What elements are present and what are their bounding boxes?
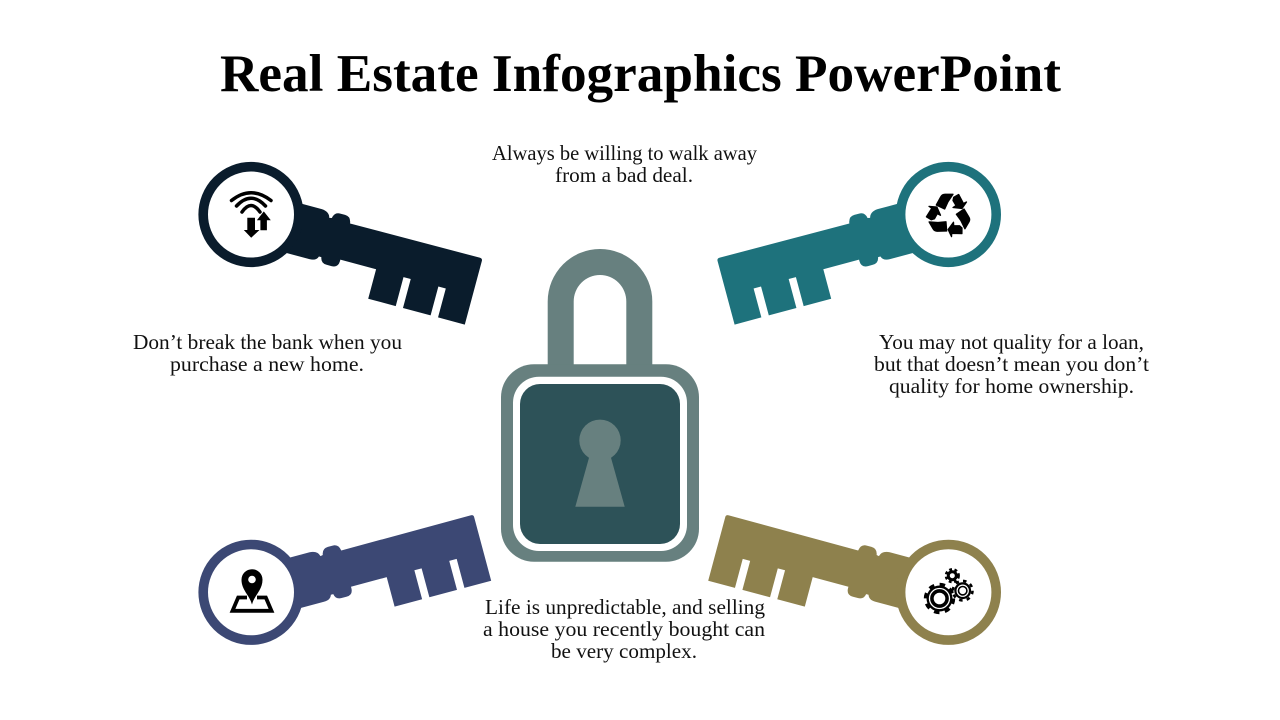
text block: walk away advice: Always be willing to walk away (492, 141, 757, 165)
text block: loan advice: quality for home ownership. (889, 374, 1134, 398)
icon: recycle arrows (922, 194, 973, 241)
text block: loan advice (874, 330, 1149, 398)
padlock (501, 249, 699, 562)
icon: three gears (926, 569, 972, 612)
key: top left navy (203, 167, 484, 325)
icon: wifi with up and down arrows (232, 193, 272, 238)
key: bottom left blue (203, 508, 491, 640)
icon: map pin on map (232, 569, 272, 611)
text block: loan advice: You may not quality for a loan, (879, 330, 1144, 354)
text block: selling advice (483, 595, 765, 663)
key: top right teal (715, 167, 996, 325)
text block: walk away advice: from a bad deal. (555, 163, 693, 187)
text block: walk away advice (492, 141, 757, 187)
key: bottom right olive (708, 508, 996, 640)
text block: selling advice: Life is unpredictable, and selling (485, 595, 765, 619)
text block: break the bank advice (133, 330, 402, 376)
title: Real Estate Infographics PowerPoint (220, 45, 1061, 103)
text block: break the bank advice: purchase a new home. (170, 352, 364, 376)
text block: loan advice: but that doesn’t mean you don’t (874, 352, 1149, 376)
text block: selling advice: be very complex. (551, 639, 697, 663)
text block: break the bank advice: Don’t break the bank when you (133, 330, 402, 354)
text block: selling advice: a house you recently bought can (483, 617, 765, 641)
